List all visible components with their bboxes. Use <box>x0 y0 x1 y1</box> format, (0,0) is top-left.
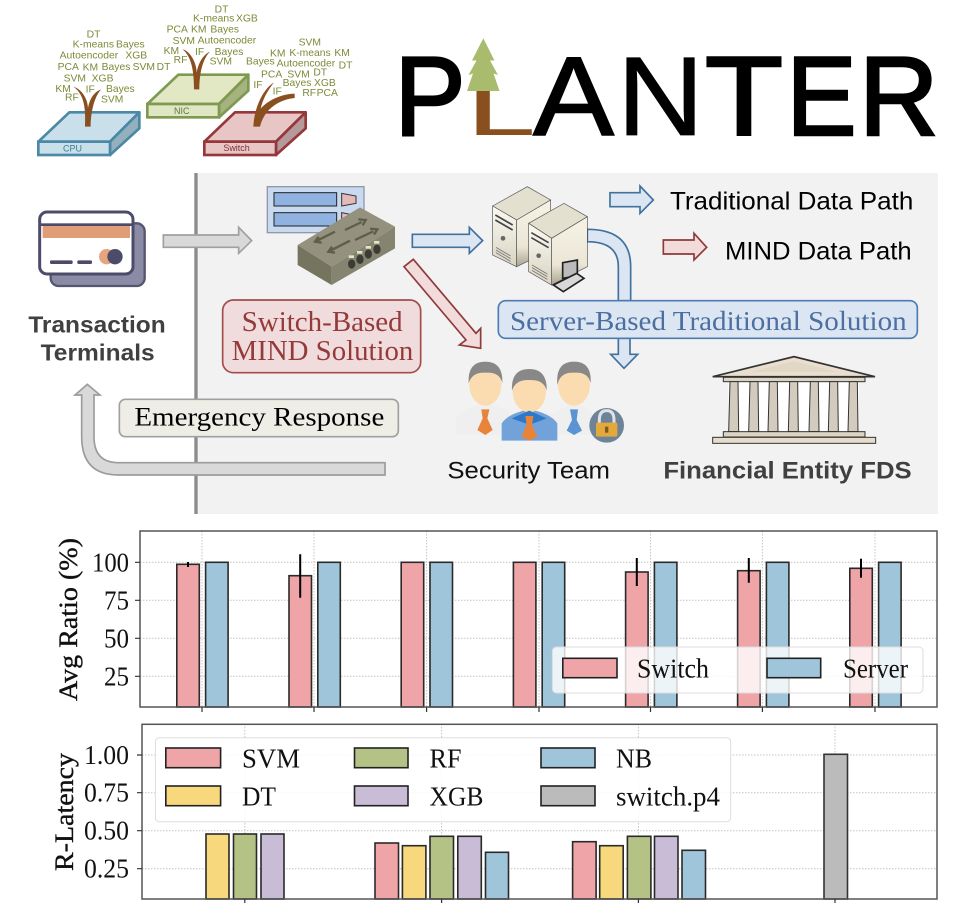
label: Transaction Terminals: Transaction <box>28 311 166 337</box>
plot background and grid <box>140 531 937 707</box>
algorithm labels: SVM <box>287 69 310 80</box>
arrow: server path to FDS <box>587 229 638 368</box>
algorithm labels: XGB <box>314 78 336 89</box>
legend: switch and server: Server <box>843 654 908 684</box>
algorithm labels: Autoencoder <box>60 51 119 62</box>
RF bars <box>234 834 651 899</box>
algorithm labels: XGB <box>236 13 258 24</box>
legend arrow: traditional data path <box>610 186 653 213</box>
logo: PLANTER <box>394 34 938 159</box>
y axis tick labels: 50 <box>104 624 129 654</box>
y axis tick labels <box>92 548 129 692</box>
algorithm labels: KM <box>334 48 350 59</box>
callout: Server-Based Traditional Solution: Server-Based Traditional Solution <box>510 306 907 336</box>
arrow: traditional path switch to server <box>412 227 483 253</box>
arrow: terminals to switch <box>163 227 252 253</box>
label: Transaction Terminals: Terminals <box>41 340 155 366</box>
algorithm labels: K-means <box>289 48 331 59</box>
NB bars <box>486 850 706 899</box>
algorithm labels: PCA <box>261 69 282 80</box>
algorithm labels: SVM <box>101 94 123 105</box>
CPU block: CPU <box>63 143 82 153</box>
algorithm labels: SVM <box>64 73 86 84</box>
algorithm labels: DT <box>157 62 171 73</box>
legend: switch and server <box>552 647 923 693</box>
legend: model types <box>155 738 731 822</box>
logo letter T: T <box>705 34 783 159</box>
algorithm labels: SVM <box>299 38 321 49</box>
CPU block <box>38 87 139 155</box>
logo tree forming the letter L <box>467 38 532 135</box>
legend: model types: XGB <box>430 782 484 812</box>
legend: model types: switch.p4 <box>616 782 720 812</box>
callout: Switch-Based MIND Solution: Switch-Based <box>242 307 403 338</box>
algorithm labels: RF <box>302 88 316 99</box>
algorithm labels: PCA <box>167 25 188 36</box>
legend: switch and server: Switch <box>637 654 709 684</box>
algorithm labels: DT <box>87 29 101 40</box>
switch bars <box>177 562 872 707</box>
y axis tick labels: 25 <box>104 662 129 692</box>
callout: Emergency Response <box>119 399 398 437</box>
algorithm labels: DT <box>313 68 328 79</box>
y axis tick labels: 1.00 <box>84 740 129 770</box>
diagram: right section <box>447 186 917 484</box>
algorithm labels: RF <box>174 55 187 66</box>
server bars <box>206 562 901 707</box>
panel: network diagram background <box>198 173 938 514</box>
switch.p4 bar <box>824 754 848 899</box>
logo letter N: N <box>617 34 704 159</box>
illustration: algorithms growing on CPU, NIC and switch <box>38 4 353 155</box>
algorithm labels: IF <box>253 80 263 91</box>
algorithm labels: Bayes <box>210 25 239 36</box>
SVM bars <box>375 842 596 899</box>
icon: payment cards <box>40 212 145 286</box>
algorithm labels: IF <box>86 84 95 95</box>
frame and tick marks <box>137 724 937 903</box>
algorithm labels: XGB <box>125 51 147 62</box>
legend: model types: SVM <box>242 744 300 774</box>
algorithm labels: KM <box>164 46 179 57</box>
callout: Emergency Response: Emergency Response <box>134 402 384 432</box>
algorithm labels: RF <box>65 93 79 104</box>
bar chart: average ratio <box>54 531 937 712</box>
algorithm labels: Autoencoder <box>277 59 336 70</box>
logo letter P: P <box>394 34 466 159</box>
y axis title: R-Latency <box>50 753 79 871</box>
logo letter R: R <box>859 34 938 159</box>
callout: Switch-Based MIND Solution <box>223 300 421 373</box>
label: Financial Entity FDS: Financial Entity FDS <box>663 457 912 484</box>
algorithm labels: PCA <box>58 62 79 73</box>
XGB bars <box>261 834 678 899</box>
label: Transaction Terminals <box>28 311 166 366</box>
logo letter A: A <box>533 34 614 159</box>
algorithm labels: DT <box>339 60 353 71</box>
algorithm labels: KM <box>55 84 71 95</box>
algorithm labels: PCA <box>317 88 338 99</box>
algorithm labels: Autoencoder <box>198 35 257 46</box>
legend: model types: RF <box>430 744 462 774</box>
icon: network switch <box>298 207 395 285</box>
y axis tick labels <box>84 740 129 884</box>
algorithm labels: SVM <box>133 62 155 73</box>
NIC block: NIC <box>174 106 190 116</box>
algorithm labels: K-means <box>73 40 114 51</box>
legend arrow: MIND data path <box>663 233 707 260</box>
algorithm labels: Bayes <box>246 57 275 68</box>
algorithm labels: KM <box>270 49 285 60</box>
frame and tick marks <box>135 531 937 712</box>
algorithm labels: Bayes <box>102 62 130 73</box>
y axis tick labels: 0.50 <box>84 816 129 846</box>
algorithm labels: KM <box>83 63 98 74</box>
y axis tick labels: 100 <box>92 548 129 578</box>
diagram: left section <box>28 187 483 475</box>
vertical boundary line <box>194 173 198 514</box>
y axis title: Avg Ratio (%) <box>54 538 83 701</box>
icon: bank building <box>713 357 876 443</box>
algorithm labels: IF <box>273 87 282 98</box>
algorithm labels: SVM <box>173 36 195 47</box>
y axis tick labels: 0.75 <box>84 778 129 808</box>
callout: Switch-Based MIND Solution: MIND Solution <box>232 336 413 367</box>
algorithm labels: SVM <box>210 57 232 68</box>
y axis tick labels: 0.25 <box>84 854 129 884</box>
error bars <box>188 554 861 598</box>
DT bars <box>206 834 623 899</box>
algorithm labels: Bayes <box>106 84 135 95</box>
arrow: MIND path switch to security team <box>404 259 481 348</box>
icon: security team <box>456 362 624 443</box>
NIC block <box>147 49 248 117</box>
legend label: MIND Data Path: MIND Data Path <box>725 238 912 265</box>
arrow: emergency response back to terminals <box>75 384 385 475</box>
label: Security Team: Security Team <box>447 457 610 484</box>
logo letter E: E <box>786 34 856 159</box>
y axis tick labels: 75 <box>104 586 129 616</box>
algorithm labels: K-means <box>193 13 234 24</box>
Switch block <box>204 82 306 155</box>
legend: model types: NB <box>616 744 652 774</box>
algorithm labels: IF <box>195 47 204 58</box>
legend: model types: DT <box>242 782 276 812</box>
plot background and grid <box>142 724 937 899</box>
algorithm labels: XGB <box>92 73 114 84</box>
icon: servers <box>493 187 587 292</box>
icon: match-action table <box>267 187 364 233</box>
algorithm labels: DT <box>215 4 229 15</box>
algorithm labels: KM <box>191 25 206 36</box>
algorithm labels <box>55 4 353 105</box>
legend label: Traditional Data Path: Traditional Data Path <box>670 188 913 215</box>
algorithm labels: Bayes <box>215 47 243 58</box>
algorithm labels: Bayes <box>116 40 145 51</box>
bar chart: relative latency <box>50 724 937 903</box>
Switch block: Switch <box>223 143 250 153</box>
algorithm labels: Bayes <box>283 78 311 89</box>
